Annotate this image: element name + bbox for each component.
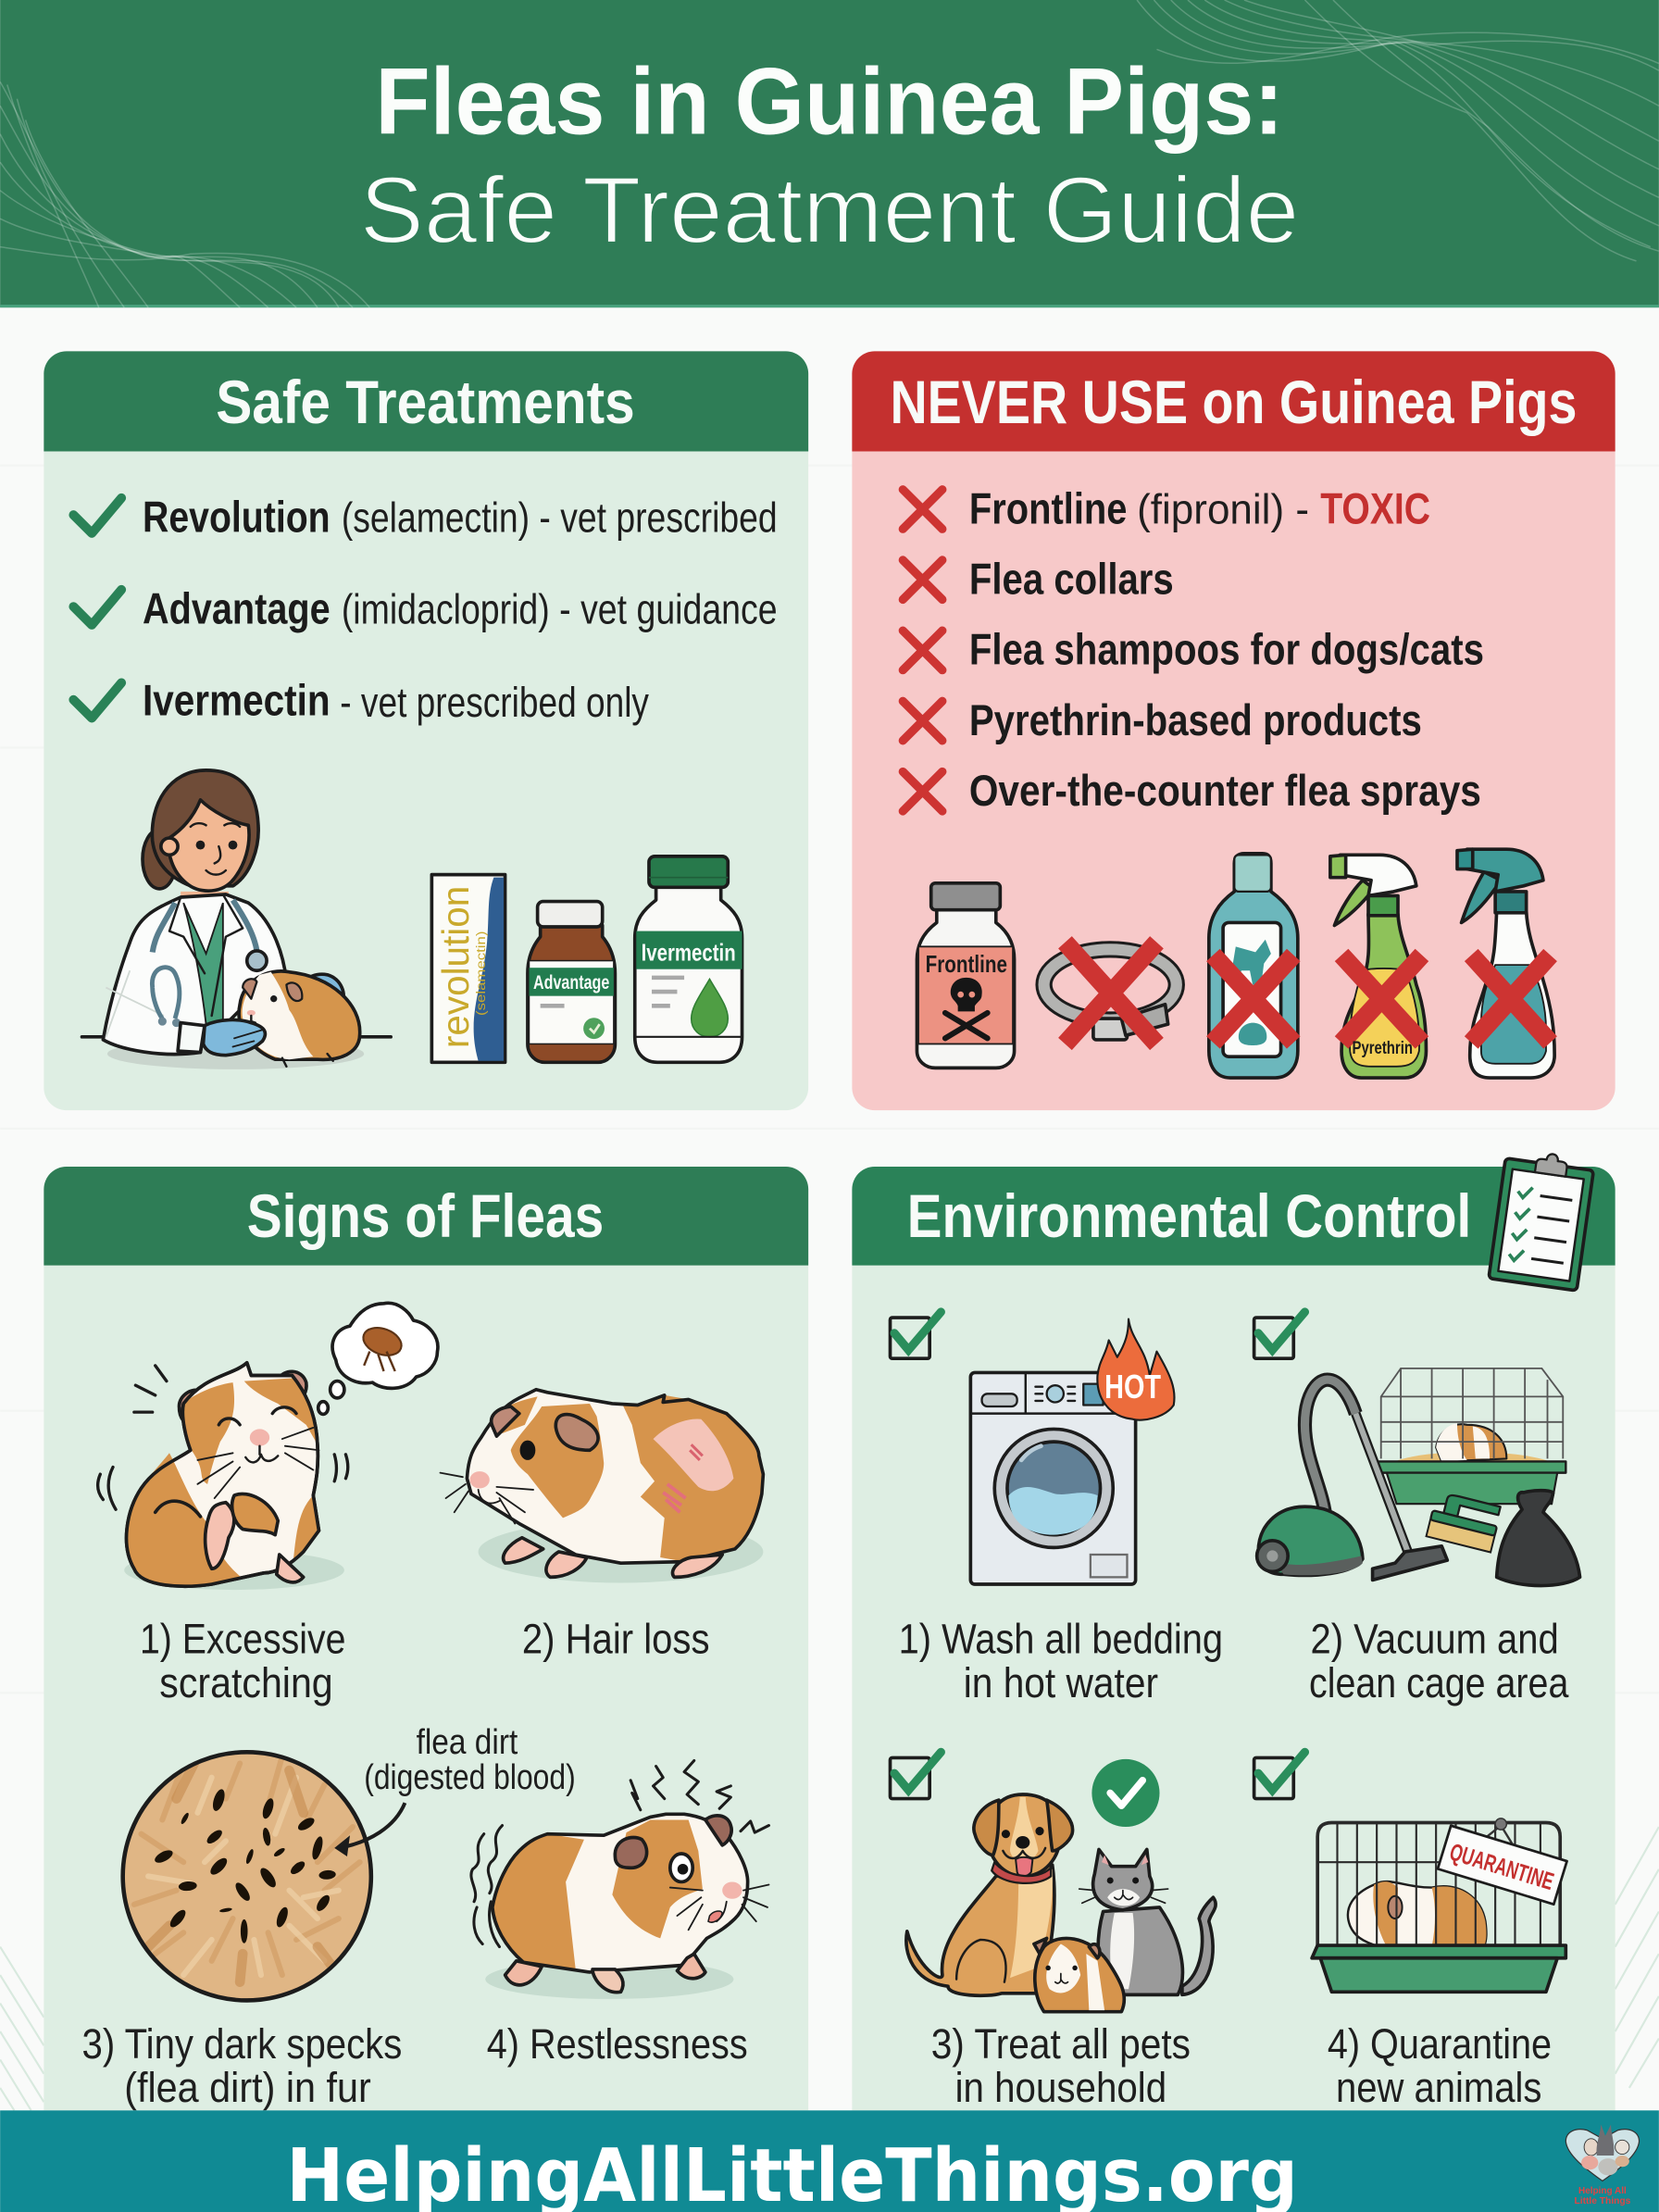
illustration: Frontline bottle xyxy=(917,883,1015,1068)
icon: checkbox 1 xyxy=(891,1312,941,1358)
illustration: Frontline bottle: Frontline xyxy=(926,952,1007,978)
header wave pattern bottom left xyxy=(0,81,369,307)
panel: safe treatments xyxy=(44,351,808,1110)
illustration: Advantage bottle: Advantage xyxy=(533,971,609,994)
illustration: quarantine cage: QUARANTINE xyxy=(1447,1839,1556,1895)
illustration: washing machine with hot flame xyxy=(970,1319,1175,1584)
caption: treat all pets: 3) Treat all pets xyxy=(931,2020,1191,2068)
logo: Helping All Little Things: Helping All xyxy=(1578,2186,1627,2196)
item: Pyrethrin products: Pyrethrin-based products xyxy=(969,696,1422,745)
panel: never use xyxy=(852,351,1615,1110)
heading: environmental control: Environmental Control xyxy=(907,1182,1471,1250)
item: Revolution: Revolution xyxy=(143,493,331,542)
item: Advantage: Advantage xyxy=(143,584,331,633)
logo: Helping All Little Things: Little Things xyxy=(1574,2196,1631,2206)
caption: tiny dark specks: 3) Tiny dark specks xyxy=(81,2020,402,2068)
illustration: crossed-out collar xyxy=(1044,943,1177,1044)
caption: wash bedding xyxy=(902,1622,1220,1698)
logo: Helping All Little Things xyxy=(1565,2125,1640,2206)
panel: environmental control xyxy=(852,1148,1615,2116)
illustration: vet with guinea pig xyxy=(81,770,391,1069)
illustration: guinea pig with hair loss xyxy=(440,1390,763,1582)
illustration: washing machine with hot flame: HOT xyxy=(1104,1368,1161,1406)
title line 2: Safe Treatment Guide xyxy=(360,157,1299,263)
illustration: crossed-out spray xyxy=(1457,849,1554,1078)
caption: vacuum and clean: clean cage area xyxy=(1309,1659,1569,1706)
item: Advantage: (imidacloprid) - vet guidance xyxy=(342,585,778,632)
icon: checkbox 2 xyxy=(1254,1312,1304,1358)
illustration: Ivermectin bottle: Ivermectin xyxy=(642,941,736,967)
panel: signs of fleas xyxy=(44,1167,808,2116)
caption: vacuum and clean xyxy=(1309,1616,1569,1706)
caption: quarantine: new animals xyxy=(1336,2064,1541,2111)
illustration: dog cat and guinea pig xyxy=(906,1759,1216,2012)
illustration: Ivermectin bottle xyxy=(635,856,742,1062)
item: Ivermectin: Ivermectin xyxy=(143,676,331,725)
callout: flea dirt xyxy=(334,1723,576,1856)
item: Ivermectin xyxy=(73,676,649,726)
caption: excessive scratching: 1) Excessive xyxy=(140,1616,345,1663)
caption: excessive scratching: scratching xyxy=(159,1659,333,1706)
item: Ivermectin: - vet prescribed only xyxy=(340,679,649,726)
caption: hair loss: 2) Hair loss xyxy=(522,1616,709,1663)
illustration: Revolution box: revolution xyxy=(434,886,477,1048)
caption: quarantine: 4) Quarantine xyxy=(1328,2020,1552,2068)
header banner xyxy=(0,0,1659,307)
callout: flea dirt: flea dirt xyxy=(417,1723,518,1762)
item: Frontline xyxy=(903,484,1430,533)
footer bar xyxy=(0,2110,1659,2212)
heading: safe treatments: Safe Treatments xyxy=(216,369,635,436)
caption: vacuum and clean: 2) Vacuum and xyxy=(1311,1616,1559,1663)
illustration: crossed-out Pyrethrin spray xyxy=(1330,855,1426,1078)
icon: checkbox 3 xyxy=(891,1752,941,1799)
caption: quarantine xyxy=(1328,2028,1550,2102)
icon: clipboard xyxy=(1489,1148,1595,1291)
item: Flea collars: Flea collars xyxy=(969,555,1174,604)
item: Advantage xyxy=(73,584,778,633)
illustration: quarantine cage xyxy=(1312,1818,1567,1992)
illustration: Revolution box xyxy=(431,875,505,1062)
illustration: restless guinea pig xyxy=(471,1760,768,1999)
caption: wash bedding: 1) Wash all bedding xyxy=(899,1616,1223,1663)
item: Flea collars xyxy=(903,555,1174,604)
title line 1: Fleas in Guinea Pigs: xyxy=(375,49,1284,155)
icon: thought bubble with flea xyxy=(318,1303,438,1414)
item: Frontline: Frontline xyxy=(969,484,1127,533)
illustration: crossed-out shampoo xyxy=(1209,854,1298,1078)
illustration: Revolution box: (selamectin) xyxy=(474,931,488,1016)
callout: flea dirt: (digested blood) xyxy=(364,1758,576,1797)
caption: treat all pets: in household xyxy=(955,2064,1166,2111)
illustration: crossed-out Pyrethrin spray: Pyrethrin xyxy=(1352,1038,1413,1058)
caption: restlessness: 4) Restlessness xyxy=(487,2020,748,2068)
caption: tiny dark specks xyxy=(81,2020,402,2111)
illustration: magnified fur with flea dirt xyxy=(123,1752,371,2000)
item: Revolution: (selamectin) - vet prescribed xyxy=(342,494,778,541)
caption: wash bedding: in hot water xyxy=(964,1659,1158,1706)
illustration: vacuum cage brush and trash bag xyxy=(1257,1368,1580,1586)
item: Frontline: TOXIC xyxy=(1320,484,1430,533)
item: Revolution xyxy=(73,493,778,542)
header wave pattern top right xyxy=(1137,0,1659,261)
caption: treat all pets xyxy=(932,2028,1189,2102)
heading: signs of fleas: Signs of Fleas xyxy=(247,1182,604,1250)
icon: green check badge xyxy=(1091,1759,1160,1827)
illustration: Advantage bottle xyxy=(528,902,615,1062)
illustration: scratching guinea pig xyxy=(98,1363,348,1590)
item: flea sprays: Over-the-counter flea sprays xyxy=(969,767,1481,816)
caption: tiny dark specks: (flea dirt) in fur xyxy=(124,2064,371,2111)
item: Frontline: (fipronil) - xyxy=(1137,485,1309,532)
caption: excessive scratching xyxy=(143,1622,344,1706)
item: Flea shampoos: Flea shampoos for dogs/cats xyxy=(969,626,1484,675)
icon: checkbox 4 xyxy=(1254,1752,1304,1799)
